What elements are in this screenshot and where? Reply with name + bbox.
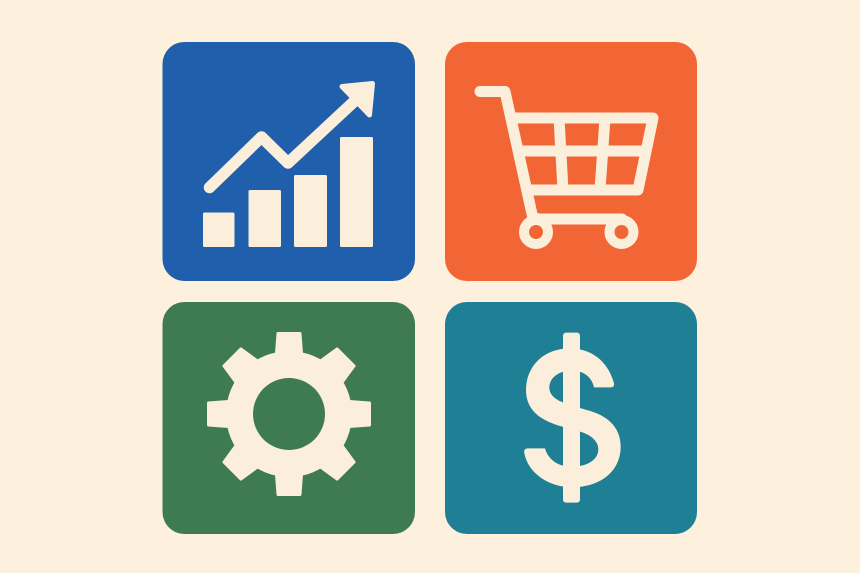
icon: gear [208, 334, 370, 494]
icon: rising arrow [210, 84, 372, 188]
panel: growth chart [162, 42, 415, 281]
panel: settings gear [162, 302, 415, 534]
icon: shopping cart [480, 92, 653, 244]
icon: bar chart [203, 137, 373, 247]
panel: dollar [445, 302, 697, 534]
panel: shopping cart [445, 42, 697, 281]
icon: dollar sign [524, 333, 621, 503]
